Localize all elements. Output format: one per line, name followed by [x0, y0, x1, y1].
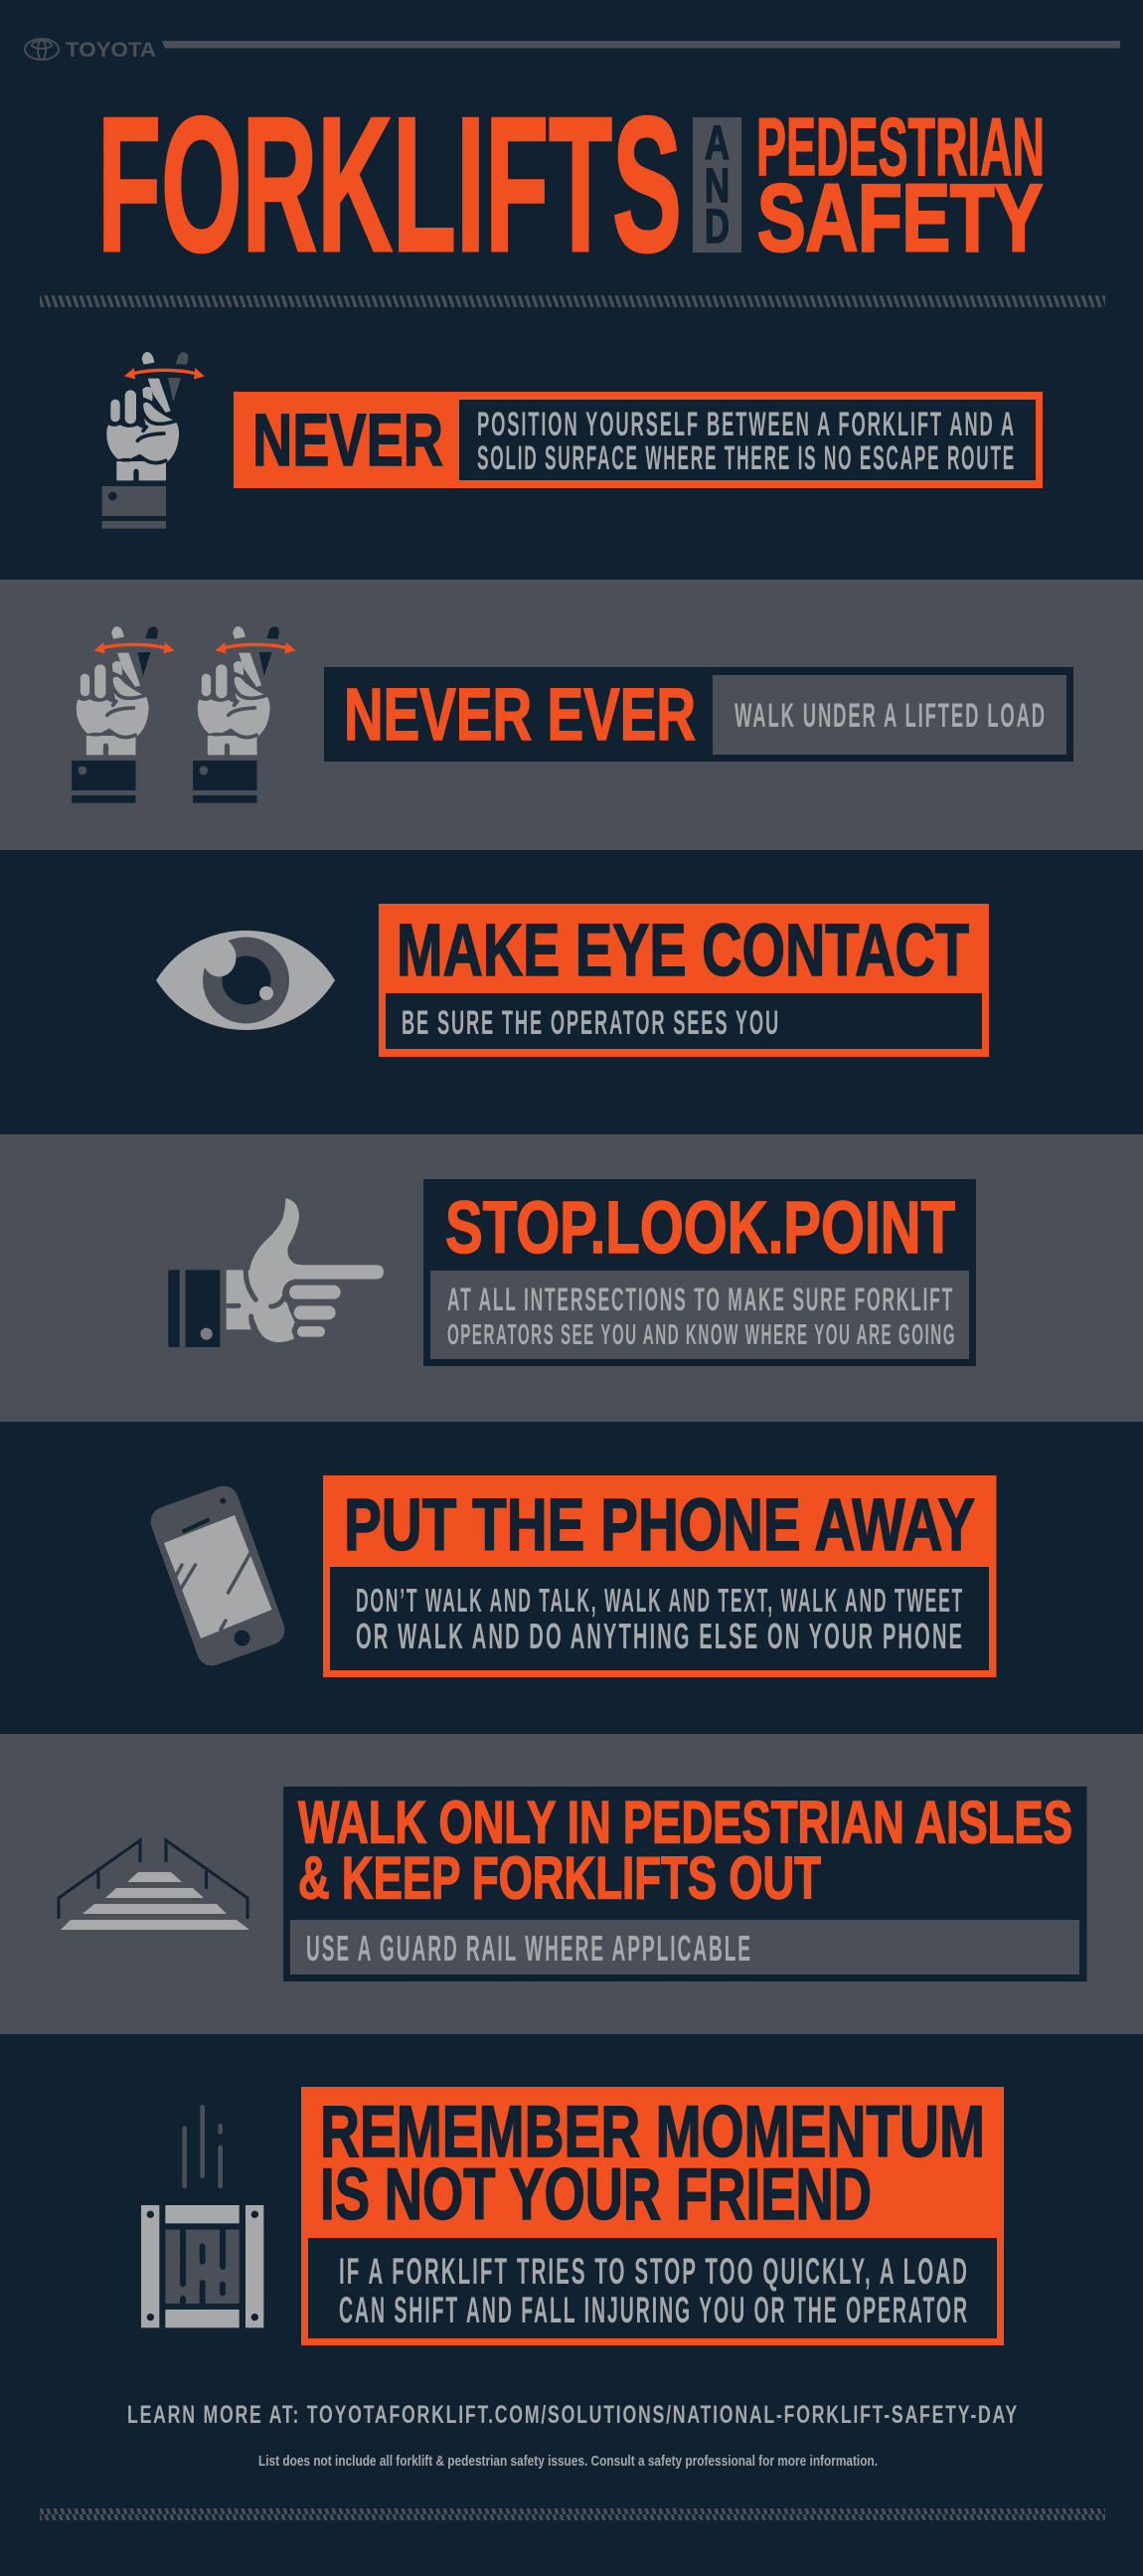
icon: phone: [146, 1481, 289, 1670]
title connector: And: D: [705, 201, 730, 254]
icon: crossed fingers left: [72, 626, 174, 803]
callout: never: [234, 392, 1043, 488]
icon: stairs with guard rail: [59, 1840, 249, 1930]
disclaimer: List does not include all forklift & pedestrian safety issues. Consult a safety professional for more information.: [258, 2453, 878, 2470]
panel: make eye contact: [156, 904, 989, 1057]
callout: eye contact: [379, 904, 989, 1057]
callout: phone away: [323, 1475, 996, 1677]
body text: escape route: [477, 406, 1016, 477]
title connector: And: [693, 117, 741, 254]
title: [97, 77, 1045, 291]
icon: Toyota emblem: [25, 39, 59, 60]
callout: pedestrian aisles: [283, 1787, 1087, 1981]
heading: make eye contact: MAKE EYE CONTACT: [397, 909, 969, 991]
callout: never ever: [324, 667, 1073, 762]
body text: operator sees you: BE SURE THE OPERATOR SEES YOU: [402, 1004, 780, 1042]
callout: momentum: [301, 2087, 1004, 2345]
panel: remember momentum: [141, 2087, 1004, 2345]
icon: crossed fingers right: [193, 626, 295, 803]
panel: pedestrian aisles: [0, 1734, 1143, 2034]
heading: walk only in pedestrian aisles: & KEEP FORKLIFTS OUT: [298, 1845, 821, 1911]
icon: pointing hand: [168, 1198, 384, 1347]
panel: stop look point: [0, 1134, 1143, 1422]
panel: put the phone away: [146, 1475, 997, 1677]
header: Toyota logo and rule: [25, 38, 1120, 62]
panel: never: [102, 352, 1043, 529]
header rule: [162, 41, 1120, 48]
heading: remember momentum: IS NOT YOUR FRIEND: [320, 2154, 872, 2235]
Toyota wordmark: TOYOTA: [66, 38, 156, 62]
callout: stop look point: [423, 1179, 976, 1366]
title connector: And: N: [705, 160, 730, 213]
icon: falling crate: [141, 2107, 263, 2327]
title connector: And: A: [705, 117, 730, 170]
heading: walk only in pedestrian aisles: [298, 1790, 1072, 1911]
heading: never: NEVER: [252, 399, 443, 481]
heading: never ever: NEVER EVER: [344, 673, 696, 756]
heading: remember momentum: [320, 2092, 985, 2235]
title word: Safety: SAFETY: [757, 165, 1043, 271]
body text: walk and talk: [356, 1582, 964, 1656]
title word: Forklifts: FORKLIFTS: [97, 77, 682, 291]
heading: stop.look.point: STOP.LOOK.POINT: [445, 1186, 955, 1269]
body text: guard rail: USE A GUARD RAIL WHERE APPLICABLE: [306, 1928, 752, 1969]
icon: eye: [156, 931, 335, 1030]
body text: intersections: [447, 1282, 956, 1351]
body text: load shift: [339, 2251, 969, 2330]
panel: never ever: [0, 580, 1143, 850]
icon: crossed fingers: [102, 352, 205, 529]
